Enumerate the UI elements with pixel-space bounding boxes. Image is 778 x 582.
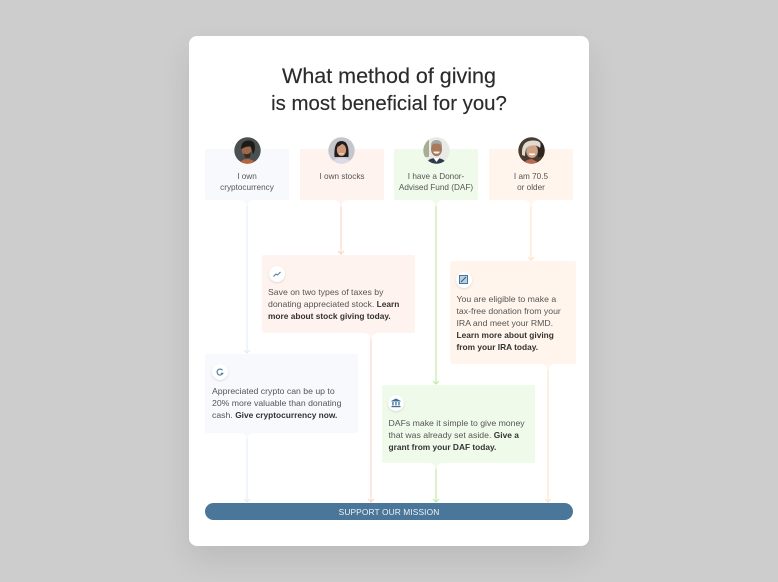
top box: age [489, 149, 573, 200]
arrow: DAF to info [433, 200, 439, 384]
text: crypto giving: cash. Give cryptocurrency now. [212, 410, 337, 420]
text: crypto giving: 20% more valuable than donating [212, 398, 341, 408]
text: DAF giving: that was already set aside. Give a [388, 430, 519, 440]
text: DAF giving: grant from your DAF today. [388, 442, 496, 452]
title: is most beneficial for you? [271, 92, 507, 114]
avatar: stock donor [328, 137, 355, 164]
top box: DAF: I have a Donor- [408, 172, 464, 181]
text: IRA giving: from your IRA today. [456, 342, 538, 352]
text: stock giving: donating appreciated stock. Learn [268, 299, 399, 309]
icon: edit square [456, 272, 472, 288]
top box: age: or older [517, 183, 545, 192]
text: IRA giving: IRA and meet your RMD. [456, 318, 553, 328]
top box: crypto: I own [237, 172, 257, 181]
top box: crypto: cryptocurrency [220, 183, 274, 192]
top box: stocks: I own stocks [319, 172, 365, 181]
arrow: stocks to info [338, 200, 344, 254]
text: DAF giving [388, 418, 525, 452]
text: stock giving [268, 287, 399, 321]
text: crypto giving [212, 386, 341, 420]
text: IRA giving: tax-free donation from your [456, 306, 561, 316]
panel: IRA giving [450, 261, 576, 364]
top box: DAF [394, 149, 478, 200]
card [189, 36, 589, 546]
panel: DAF giving [382, 385, 535, 463]
text: IRA giving: Learn more about giving [456, 330, 554, 340]
arrow: crypto info to support [244, 433, 250, 502]
avatar: older donor [518, 137, 545, 164]
arrow: DAF info to support [433, 463, 439, 502]
text: stock giving: Save on two types of taxes by [268, 287, 383, 297]
text: crypto giving: Appreciated crypto can be up to [212, 386, 335, 396]
icon: crypto coin [212, 364, 228, 380]
top box: age: I am 70.5 [514, 172, 548, 181]
connector notches [239, 200, 556, 469]
text: DAF giving: DAFs make it simple to give money [388, 418, 525, 428]
button: support our mission [205, 503, 573, 520]
title: What method of giving [282, 64, 496, 88]
top box: DAF: Advised Fund (DAF) [399, 183, 473, 192]
arrow: crypto to info [244, 200, 250, 353]
avatar: DAF donor [423, 137, 450, 164]
text: IRA giving [456, 294, 561, 352]
avatar: crypto donor [234, 137, 261, 164]
title [271, 64, 507, 114]
button: support our mission: SUPPORT OUR MISSION [339, 507, 439, 517]
panel: crypto giving [205, 354, 358, 433]
panel: stock giving [262, 255, 415, 333]
top box: stocks [300, 149, 384, 200]
text: IRA giving: You are eligible to make a [456, 294, 556, 304]
icon: bank [388, 395, 404, 411]
text: stock giving: more about stock giving today. [268, 311, 391, 321]
arrow: stock info to support [368, 333, 374, 502]
top box: crypto [205, 149, 289, 200]
icon: trend line [269, 266, 285, 282]
arrow: IRA info to support [545, 364, 551, 502]
arrow: age to info [528, 200, 534, 260]
